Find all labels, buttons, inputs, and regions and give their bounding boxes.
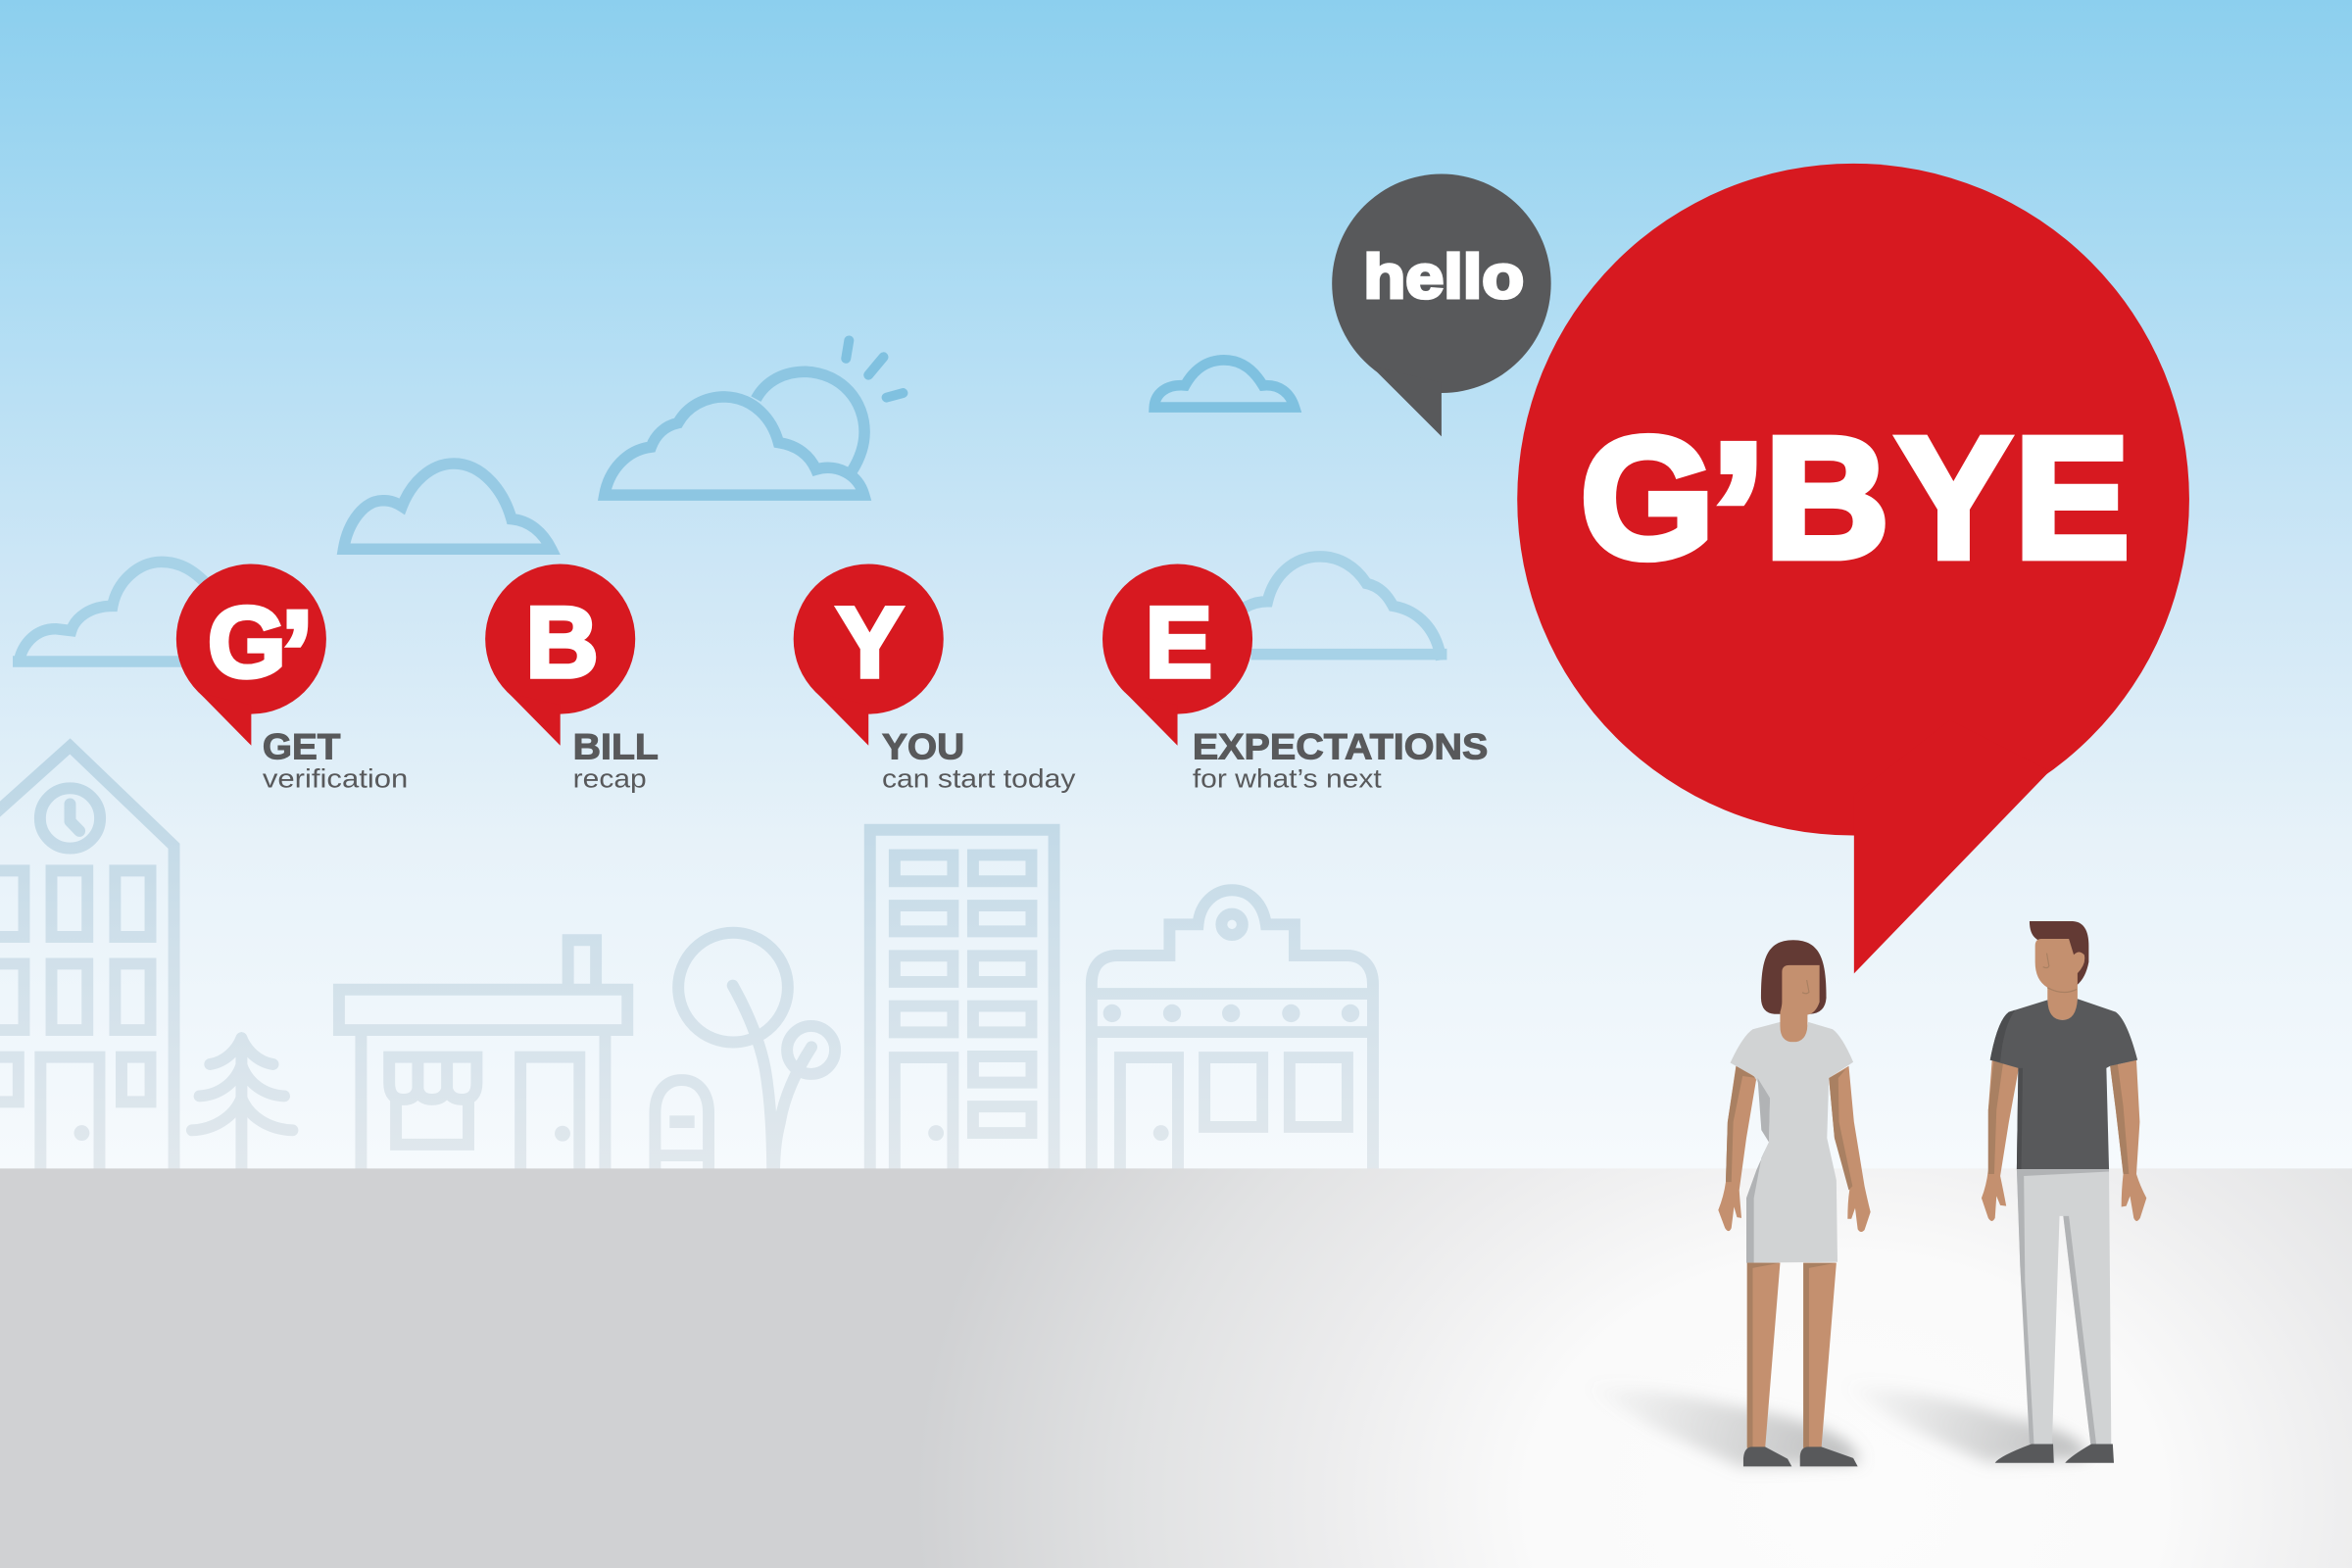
windows [895,855,1031,1133]
sky background [0,0,2352,1170]
bubble: E: E [1146,585,1212,698]
right arm [2110,1060,2146,1221]
label: YOU can start today: YOU [882,725,964,766]
right arm [1829,1066,1871,1232]
bubble: G'BYE: B [1765,403,1889,595]
pine tree [192,1038,292,1185]
bubble: Y: Y [836,585,904,698]
dots [1103,1004,1359,1022]
building: clock house [0,746,174,1170]
bubble: G'BYE: E [2015,403,2130,595]
ground shadows of people [1584,1383,2088,1467]
bubble: G'BYE [1517,164,2189,973]
cloud: right [1245,557,1446,660]
bubble: G'BYE: ’ [1710,402,1767,629]
bubble: E [1102,564,1252,746]
bubble: hello [1332,174,1551,436]
shoes [1995,1445,2114,1463]
left arm [1718,1064,1756,1231]
dress [1731,1022,1853,1263]
door and windows [1120,1057,1348,1170]
label: GET verification: verification [263,764,408,794]
left leg shade [1747,1263,1780,1448]
hair [1761,940,1827,1014]
bubble: G': G [208,585,286,698]
right arm shade [2110,1064,2129,1174]
trouser shades [2017,1169,2109,1445]
bubble: hello: hello [1363,243,1524,312]
windows [0,870,151,1102]
person: woman [1718,940,1871,1466]
jaw and nose [2043,954,2077,993]
door [40,1057,99,1170]
shop door [520,1057,579,1170]
left arm shade [1726,1066,1756,1182]
left arm shade [1988,1060,2003,1174]
ground [0,1168,2352,1568]
head and neck [2035,939,2084,1020]
sun arc [756,371,864,471]
cloud: small [1154,360,1295,408]
round trees [678,933,835,1185]
shoes [1743,1446,1858,1466]
nose [1802,980,1809,994]
bubble: G' [176,564,326,746]
person: man [1982,921,2146,1463]
bubble: B [485,564,635,746]
label: EXPECTATIONS for what's next: for what’s next [1193,764,1382,794]
shop [339,940,627,1170]
label: EXPECTATIONS for what's next [1193,725,1488,794]
sun rays [846,340,903,398]
bubble: B: B [525,585,599,698]
apartment tower [870,830,1054,1170]
label: BILL recap [573,725,659,794]
label: YOU can start today: can start today [882,764,1076,794]
awning [389,1057,476,1145]
dress shade [1746,1078,1770,1263]
town hall building [1092,890,1373,1170]
t-shirt [1990,999,2137,1169]
bubble: G'BYE: Y [1896,403,2011,595]
left leg [1747,1263,1780,1448]
label: EXPECTATIONS for what's next: EXPECTATIONS [1193,725,1488,766]
door [895,1057,953,1170]
mailbox [655,1080,709,1170]
right arm shade [1829,1069,1852,1190]
bubble: Y [794,564,944,746]
label: YOU can start today [882,725,1076,794]
label: GET verification: GET [263,725,341,766]
right leg [1803,1263,1837,1448]
bubble: G': ’ [280,586,314,720]
trousers [2017,1169,2111,1445]
right leg shade [1803,1263,1837,1448]
round ornament [1221,914,1243,935]
cloud with sun [605,340,903,495]
t-shirt shade [1990,1010,2023,1169]
cloud: far left [13,562,213,662]
clock [40,788,100,849]
cloud outline [605,397,864,495]
label: BILL recap: recap [573,764,647,794]
label: GET verification [263,725,408,794]
cloud: middle left [344,464,551,549]
label: BILL recap: BILL [573,725,659,766]
bubble: G'BYE: G [1580,403,1714,595]
left arm [1982,1060,2019,1221]
face and neck [1780,965,1820,1042]
hair [2030,921,2088,985]
